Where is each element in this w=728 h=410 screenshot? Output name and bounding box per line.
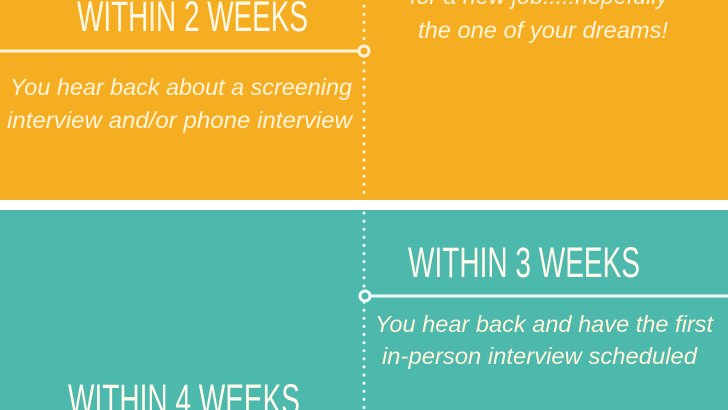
text block: screening interview: [7, 74, 353, 133]
panel: orange top section: [0, 0, 728, 200]
connector line: 3 weeks: [370, 294, 728, 298]
timeline: dotted vertical line: [359, 0, 370, 410]
text block: dream job: the one of your dreams!: [418, 17, 669, 43]
connector line: 2 weeks: [0, 50, 359, 52]
timeline node: 2 weeks: [359, 46, 369, 56]
timeline node: 3 weeks: [360, 291, 370, 301]
text block: screening interview: You hear back about a screening: [10, 74, 352, 100]
panel: teal bottom section: [0, 210, 728, 410]
text block: in-person interview: in-person interview scheduled: [382, 343, 698, 369]
text block: in-person interview: [375, 311, 715, 369]
text block: screening interview: interview and/or phone interview: [7, 107, 353, 133]
text block: in-person interview: You hear back and have the first: [375, 311, 715, 337]
text block: dream job: [410, 0, 670, 43]
